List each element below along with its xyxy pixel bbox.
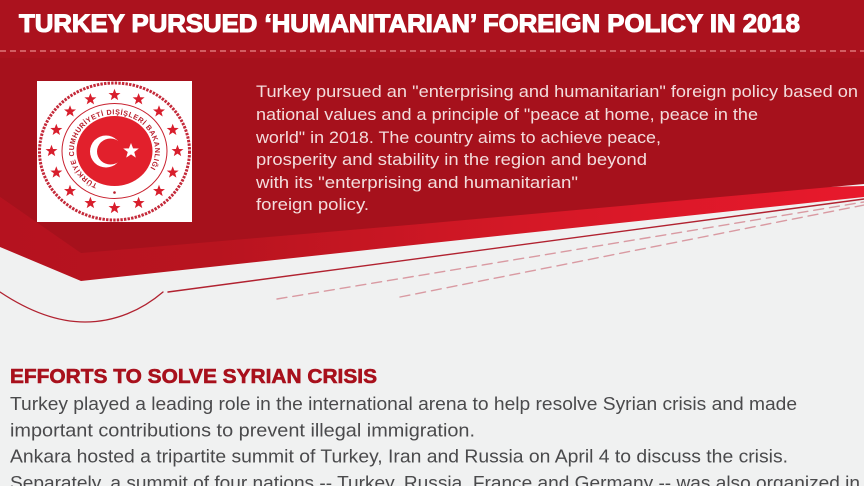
decorative swoosh lines — [0, 199, 864, 322]
red disc — [76, 116, 152, 186]
section heading: EFFORTS TO SOLVE SYRIAN CRISIS — [10, 366, 377, 388]
title strip — [0, 0, 864, 58]
dashed line upper — [277, 202, 864, 299]
dashed title underline — [0, 50, 864, 52]
seal background — [37, 81, 192, 222]
dark red panel — [0, 0, 864, 253]
left wedge — [0, 190, 160, 253]
ring dot — [113, 191, 116, 194]
crescent — [90, 136, 122, 168]
section body text — [10, 393, 860, 486]
intro paragraph: Turkey pursued an "enterprising and humanitarian" foreign policy based on — [256, 82, 858, 101]
intro paragraph: prosperity and stability in the region and beyond — [256, 150, 647, 169]
rope ring — [40, 83, 190, 220]
crescent star — [123, 143, 139, 158]
dashed line lower — [400, 205, 864, 297]
bright lower band — [0, 186, 864, 281]
stars ring — [46, 89, 184, 213]
section body text: Ankara hosted a tripartite summit of Turkey, Iran and Russia on April 4 to discuss the crisis. — [10, 446, 788, 466]
section body text: important contributions to prevent illegal immigration. — [10, 420, 475, 440]
intro paragraph — [255, 82, 858, 214]
solid line — [168, 199, 864, 292]
red header area — [0, 0, 864, 281]
curved line — [0, 292, 163, 322]
ring text: TÜRKİYE CUMHURİYETİ DIŞİŞLERİ BAKANLIĞI — [69, 108, 160, 188]
logo: ministry seal — [37, 81, 192, 222]
intro paragraph: foreign policy. — [256, 195, 369, 214]
intro paragraph: world" in 2018. The country aims to achieve peace, — [255, 128, 661, 147]
intro paragraph: national values and a principle of "peace at home, peace in the — [256, 105, 758, 124]
section body text: Turkey played a leading role in the international arena to help resolve Syrian crisis and made — [10, 393, 797, 414]
inner ring — [62, 104, 167, 198]
intro paragraph: with its "enterprising and humanitarian" — [255, 173, 578, 192]
title: TURKEY PURSUED ‘HUMANITARIAN’ FOREIGN POLICY IN 2018 — [19, 10, 800, 38]
